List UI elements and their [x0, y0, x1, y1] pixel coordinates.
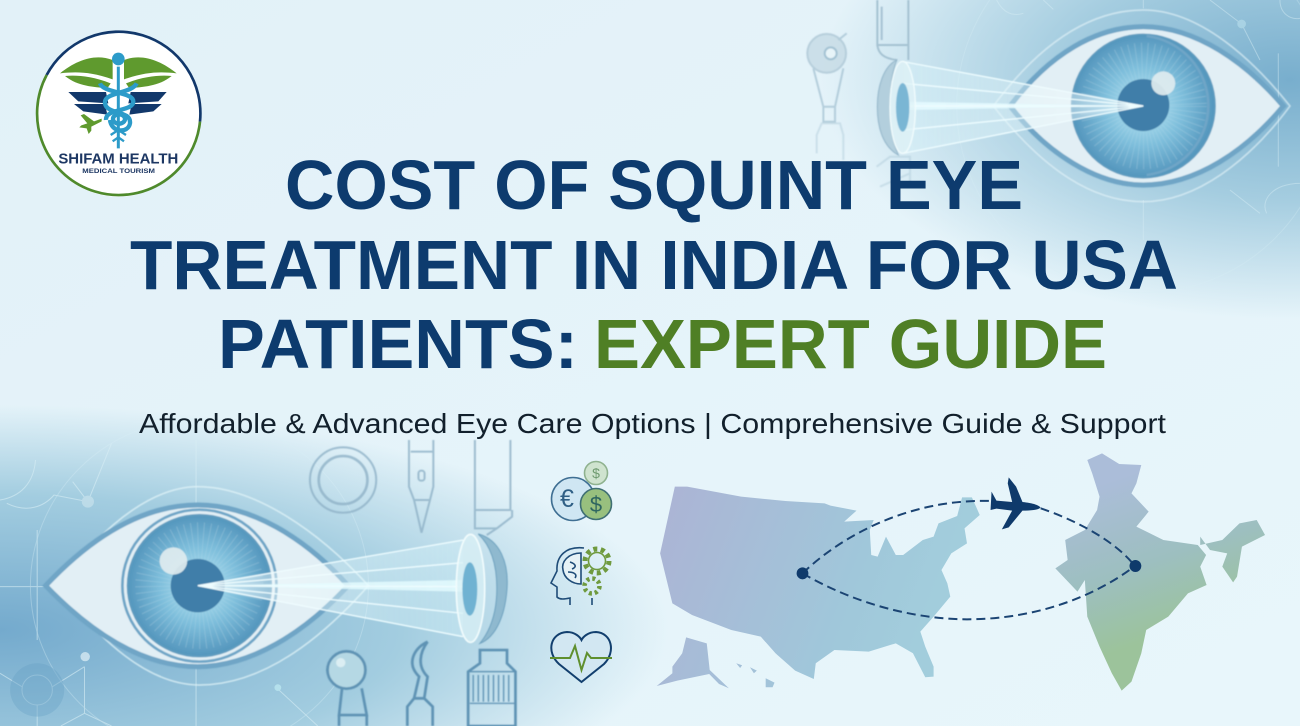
logo badge circle: [37, 33, 200, 197]
title: TREATMENT IN INDIA FOR USA: [130, 226, 1178, 304]
icon: currency coins: $: [592, 465, 600, 481]
subtitle: Affordable & Advanced Eye Care Options | Comprehensive Guide & Support: [139, 408, 1166, 439]
icon: curved blade: [407, 642, 433, 726]
title: [130, 146, 1178, 383]
title: EXPERT GUIDE: [594, 305, 1107, 383]
eye with laser beam: bottom left: [46, 487, 507, 685]
pupil: [1117, 79, 1169, 131]
pupil: [171, 559, 225, 612]
icon: currency coins: €: [560, 485, 574, 513]
highlight: [160, 547, 187, 575]
India map: [1055, 453, 1265, 691]
icon: cylinder tool: [877, 0, 908, 60]
icon: cylinder tool: [475, 440, 512, 535]
icon: ring instrument: [310, 447, 376, 513]
Alaska and Hawaii: [657, 637, 775, 688]
icon: round probe: [807, 33, 847, 122]
icon: airplane: [991, 477, 1041, 529]
logo caduceus: [100, 53, 137, 148]
contact lens: [877, 60, 915, 155]
eye outline: [46, 505, 348, 667]
logo wings: [60, 57, 177, 88]
icon: head with brain and gears: [551, 548, 609, 605]
laser beam: [902, 62, 1143, 153]
icon: scalpel tip: [409, 440, 433, 533]
logo plane: [79, 114, 102, 134]
iris: [1072, 34, 1215, 178]
USA map: [657, 487, 980, 688]
icon: currency coins: $: [590, 492, 602, 517]
icon: heart with pulse: [550, 632, 612, 682]
highlight: [1151, 71, 1175, 95]
surgical tools: top right: [807, 0, 910, 187]
logo navy wings: [68, 92, 167, 115]
logo name: SHIFAM HEALTH: [58, 151, 178, 167]
route points: [797, 560, 1141, 579]
icon: vial: [468, 650, 515, 726]
icon: round probe: [328, 651, 367, 726]
maps and route: [657, 453, 1265, 691]
logo: [37, 32, 200, 197]
laser beam: [198, 540, 473, 637]
eye with laser beam: top right: [877, 10, 1290, 202]
surgical tools: bottom left: [310, 440, 515, 726]
icon: vial base: [817, 123, 910, 187]
flight route: [803, 501, 1135, 619]
network decoration: bottom left: [0, 419, 368, 726]
logo tagline: MEDICAL TOURISM: [82, 168, 156, 175]
network decoration: top right: [957, 0, 1300, 293]
contact lens: [456, 534, 507, 643]
eye outline: [1010, 27, 1283, 185]
iris: [122, 510, 276, 662]
title: PATIENTS:: [218, 305, 578, 383]
title: COST OF SQUINT EYE: [285, 146, 1023, 224]
icon: currency coins: [552, 462, 612, 520]
